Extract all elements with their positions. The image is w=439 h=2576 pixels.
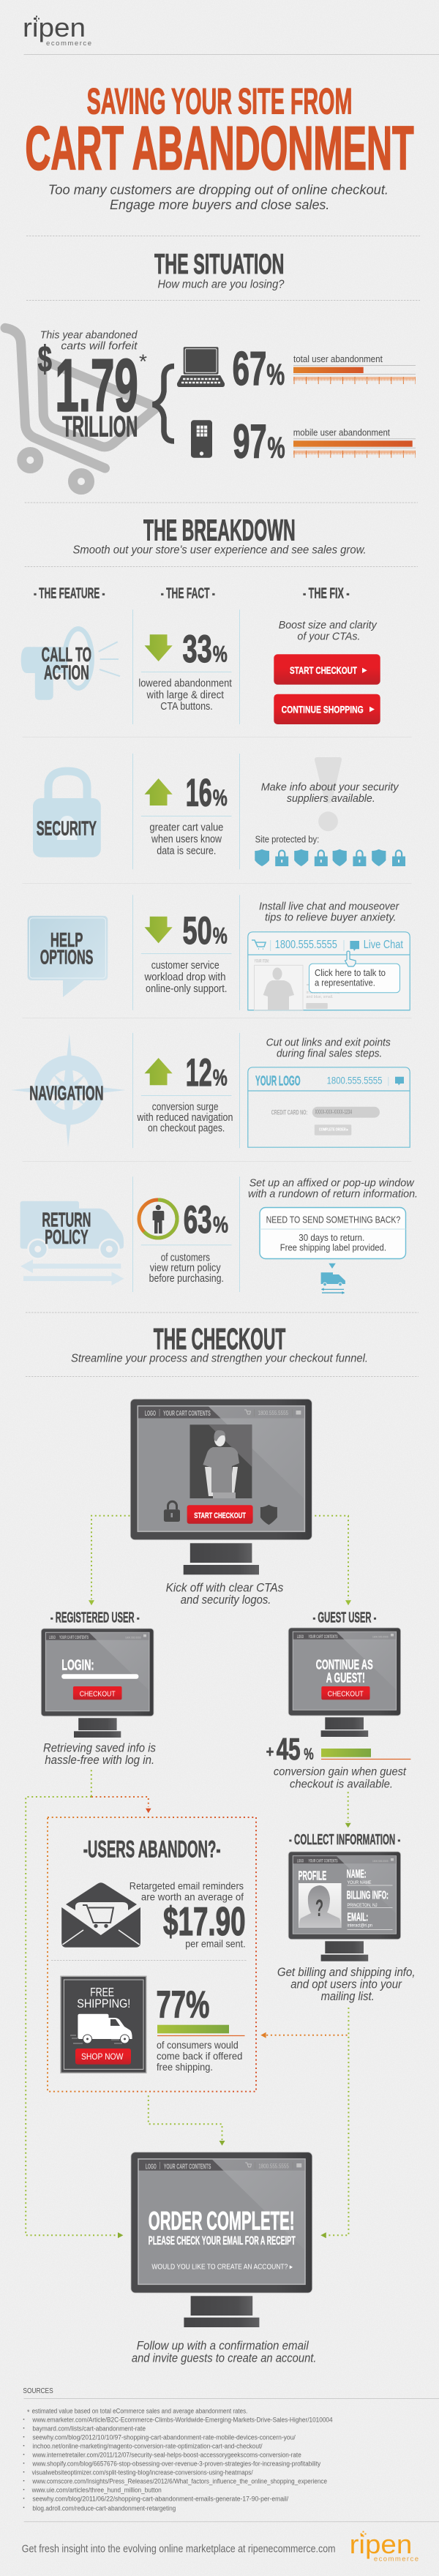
stat: 67 percent: 67: [233, 342, 266, 395]
fact text: view return policy: [150, 1263, 221, 1274]
checkout mockup: [248, 1067, 410, 1147]
profile fields: BILLING INFO:: [347, 1889, 389, 1901]
checkout mockup: CREDIT CARD NO:: [271, 1108, 307, 1116]
sources: www.shopify.com/blog/6657676-stop-obsessing-over-revenue-3-proven-strategies-for-increasing-profitability: [31, 2460, 321, 2467]
monitor: guest: CONTINUE AS: [316, 1657, 373, 1672]
fix text: [266, 1036, 391, 1059]
stat: 67 percent: %: [266, 357, 285, 391]
panel: help options: OPTIONS: [40, 946, 93, 969]
footer logo: ripen: [350, 2529, 412, 2559]
icon: small truck: [321, 1263, 345, 1294]
button: start checkout: [274, 654, 380, 685]
stat: 77 percent: come back if offered: [157, 2050, 242, 2062]
button: complete order: COMPLETE ORDER ▸: [319, 1128, 348, 1133]
fix text: [255, 781, 399, 845]
security badges: [255, 849, 405, 866]
stat: 50 percent: 50: [183, 909, 212, 953]
monitor: order complete: [131, 2152, 312, 2327]
icon: exclamation mark: [315, 757, 342, 831]
panel: security: SECURITY: [37, 817, 97, 840]
ad: free shipping: [61, 1976, 146, 2073]
text: email value: [130, 1880, 246, 1950]
stat: 33 percent: 33: [183, 628, 212, 671]
sources: SOURCES: [23, 2387, 53, 2395]
fact text: with reduced navigation: [137, 1112, 233, 1124]
stat: plus 45 percent: [266, 1732, 410, 1766]
flow arrowheads: [89, 1600, 351, 2238]
ad: free shipping: FREE: [90, 1986, 114, 1999]
stat: plus 45 percent: +: [266, 1743, 274, 1761]
ad: free shipping: SHOP NOW: [81, 2051, 124, 2062]
sources: baymard.com/lists/cart-abandonment-rate: [32, 2425, 146, 2432]
input field: [312, 1107, 380, 1118]
text: follow up: [132, 2340, 316, 2365]
icon: lock: [164, 1501, 180, 1522]
column headers: - THE FIX -: [303, 586, 350, 602]
panel: return policy: RETURN: [42, 1209, 91, 1231]
input field: XXXX-XXX-XXXX-1234: [315, 1109, 352, 1116]
monitor: login: LOGO: [49, 1635, 56, 1640]
fix text: [259, 900, 399, 923]
heading: the breakdown: THE BREAKDOWN: [143, 513, 296, 547]
popup: click here: [309, 964, 399, 993]
icon: hand cursor: [345, 951, 356, 966]
bar: total user abandonment: [293, 354, 416, 380]
icon: speech bubble: [28, 916, 108, 997]
fact text: when users know: [151, 834, 222, 846]
icon: envelope with cart: [61, 1882, 140, 1948]
stat: 1.79 trillion: [38, 330, 148, 443]
fix text: [279, 619, 378, 642]
text: email value: $17.90: [163, 1899, 246, 1944]
column headers: - THE FACT -: [161, 586, 215, 602]
monitor: order complete: ORDER COMPLETE!: [149, 2207, 295, 2236]
button: continue shopping: [274, 694, 380, 724]
figure: t-shirt model: [263, 967, 294, 1010]
text: email value: Retargeted email reminders: [130, 1880, 244, 1891]
fact text: customer service: [151, 960, 220, 972]
heading: registered user: - REGISTERED USER -: [50, 1610, 140, 1626]
monitor: start checkout: [130, 1399, 312, 1574]
sources: www.internetretailer.com/2011/12/07/security-seal-helps-boost-accessorygeekscoms-conversion-rate: [31, 2451, 301, 2458]
text: kick off: [166, 1581, 283, 1607]
column headers: - THE FEATURE -: [34, 586, 105, 602]
profile photo: ?: [315, 1895, 323, 1921]
monitor: login: YOUR CART CONTENTS: [59, 1635, 89, 1640]
text: billing info: [277, 1966, 416, 2003]
fact text: [137, 1102, 233, 1135]
fact text: lowered abandonment: [138, 677, 232, 689]
monitor: order complete: WOULD YOU LIKE TO CREATE AN ACCOUNT? ▸: [151, 2263, 293, 2271]
monitor: guest: LOGO: [297, 1634, 304, 1640]
panel: users abandon: [51, 1835, 247, 2073]
button: complete order: [315, 1124, 351, 1135]
stat: 1.79 trillion: carts will forfeit: [61, 340, 138, 352]
fix text: Boost size and clarity: [279, 619, 378, 631]
heading: the situation: THE SITUATION: [154, 249, 284, 280]
panel: call to action: [21, 619, 380, 724]
icon: white truck: [70, 2014, 132, 2043]
icon: phone: [191, 420, 212, 458]
stat: 97 percent: 97: [233, 415, 267, 468]
sources: estimated value based on total eCommerce sales and average abandonment rates.: [32, 2407, 247, 2414]
fact text: [149, 822, 223, 857]
column headers: [34, 586, 350, 602]
header logo: ecommerce: [46, 40, 91, 48]
icon: arrow up: [145, 1058, 173, 1085]
fix text: Cut out links and exit points: [266, 1036, 391, 1048]
stat: 97 percent: %: [268, 430, 285, 464]
live chat mockup: 1800.555.5555: [275, 939, 337, 951]
panel: help options: [28, 900, 410, 1010]
heading: the situation: How much are you losing?: [158, 278, 285, 290]
icon: arrow down: [145, 917, 173, 943]
text: follow up: and invite guests to create an account.: [132, 2351, 316, 2365]
icon: shield: [260, 1505, 277, 1525]
fix text: during final sales steps.: [277, 1047, 382, 1059]
sources: visualwebsiteoptimizer.com/split-testing-blog/increase-conversions-using-heatmaps/: [32, 2468, 253, 2476]
heading: the checkout: [71, 1322, 368, 1365]
header logo: ripen: [23, 12, 86, 42]
fix text: Site protected by:: [255, 835, 319, 845]
stat: 63 percent: %: [213, 1212, 228, 1238]
button: start checkout: START CHECKOUT: [194, 1512, 246, 1520]
bar: mobile user abandonment: mobile user abandonment: [293, 428, 390, 438]
brace: [153, 366, 174, 441]
text: retrieving saved info: Retrieving saved info is: [43, 1741, 156, 1754]
stat: plus 45 percent: 45: [277, 1732, 301, 1766]
monitor: guest: A GUEST!: [326, 1670, 365, 1685]
monitor: login: 1800.555.5555: [125, 1636, 141, 1639]
fix text: of your CTAs.: [297, 630, 360, 642]
sources: inchoo.net/online-marketing/magento-conversion-rate-optimization-cart-and-checkout/: [32, 2442, 263, 2449]
monitor: collect information: [288, 1852, 401, 1961]
monitor: login: [41, 1629, 154, 1738]
icon: arrow down: [145, 634, 173, 661]
icon: arrow up: [145, 778, 173, 806]
monitor: start checkout: LOGO: [145, 1410, 156, 1418]
live chat mockup: Live Chat: [364, 939, 404, 951]
profile fields: [347, 1869, 392, 1930]
fact text: on checkout pages.: [148, 1123, 225, 1135]
panel: navigation: NAVIGATION: [29, 1081, 104, 1104]
stat: 63 percent: 63: [184, 1198, 212, 1242]
monitor: collect information: LOGO: [297, 1858, 304, 1864]
fact text: data is secure.: [157, 845, 216, 857]
profile fields: EMAIL:: [347, 1912, 368, 1924]
panel: security: [33, 757, 405, 866]
intro text: Engage more buyers and close sales.: [110, 197, 329, 212]
sources: seewhy.com/blog/2012/10/10/97-shopping-cart-abandonment-rate-mobile-devices-concern-you/: [32, 2433, 296, 2441]
stat: 1.79 trillion: TRILLION: [62, 411, 138, 443]
button: checkout: CHECKOUT: [328, 1689, 364, 1698]
monitor: order complete: 1800.555.5555: [258, 2163, 289, 2170]
sources: seewhy.com/blog/2011/06/22/shopping-cart-abandonment-emails-generate-17-90-per-email/: [32, 2495, 289, 2502]
profile fields: NAME:: [347, 1869, 367, 1881]
stat: 12 percent: 12: [186, 1051, 212, 1094]
fact text: online-only support.: [146, 983, 227, 995]
stat: 1.79 trillion: 1.79: [55, 344, 138, 427]
popup: return information: [260, 1207, 405, 1258]
text: retrieving saved info: [43, 1741, 156, 1767]
text: kick off: Kick off with clear CTAs: [166, 1581, 283, 1594]
fact text: [144, 960, 227, 995]
sources: www.uie.com/articles/three_hund_million_button: [31, 2486, 162, 2493]
text: email value: per email sent.: [185, 1938, 246, 1950]
stat: 77 percent: [157, 1983, 244, 2073]
bar: total user abandonment: total user abandonment: [293, 354, 383, 364]
live chat mockup: in black, white, red,: [306, 991, 340, 995]
popup: return information: NEED TO SEND SOMETHING BACK?: [266, 1214, 400, 1225]
stat: 77 percent: free shipping.: [157, 2061, 213, 2073]
stat: 16 percent: %: [213, 784, 228, 811]
fact text: workload drop with: [144, 972, 225, 983]
monitor: start checkout: 1800.555.5555: [258, 1410, 288, 1416]
sources: www.comscore.com/Insights/Press_Releases/2012/6/What_factors_influence_the_online_shopping_experience: [31, 2477, 327, 2485]
footer logo: ecommerce: [374, 2556, 419, 2564]
flow connectors: [26, 1516, 348, 2235]
fix text: suppliers available.: [287, 792, 375, 805]
stat: plus 45 percent: %: [304, 1745, 314, 1763]
icon: cart: [252, 940, 266, 949]
popup: return information: Free shipping label provided.: [280, 1242, 386, 1253]
icon: chat bubble: [350, 941, 359, 951]
text: billing info: Get billing and shipping info,: [277, 1966, 416, 1979]
monitor: order complete: YOUR CART CONTENTS: [164, 2163, 211, 2171]
button: start checkout: START CHECKOUT: [290, 665, 358, 676]
fix text: Install live chat and mouseover: [259, 900, 399, 912]
live chat mockup: [248, 932, 410, 1010]
icon: person: [153, 1205, 164, 1233]
profile fields: YOUR NAME: [347, 1880, 372, 1885]
heading: guest user: - GUEST USER -: [313, 1610, 376, 1626]
monitor: guest: YOUR CART CONTENTS: [309, 1634, 338, 1640]
heading: the checkout: Streamline your process and strengthen your checkout funnel.: [71, 1353, 368, 1365]
monitor: collect information: 1800.555.5555: [372, 1859, 389, 1863]
bar: mobile user abandonment: [293, 428, 416, 454]
fix text: with a rundown of return information.: [248, 1188, 418, 1201]
popup: return information: 30 days to return.: [299, 1232, 364, 1243]
product photo: [190, 1424, 252, 1498]
panel: help options: HELP: [50, 928, 83, 951]
icon: chat bubble: [395, 1077, 404, 1086]
sources: blog.adroll.com/reduce-cart-abandonment-retargeting: [32, 2504, 176, 2512]
button: checkout: [73, 1686, 121, 1700]
monitor: order complete: PLEASE CHECK YOUR EMAIL FOR A RECEIPT: [149, 2234, 296, 2248]
text: email value: are worth an average of: [141, 1890, 244, 1902]
fact text: of customers: [161, 1252, 210, 1263]
monitor: guest: 1800.555.5555: [372, 1634, 389, 1639]
monitor: collect information: YOUR CART CONTENTS: [309, 1858, 338, 1864]
text: billing info: and opt users into your: [290, 1978, 402, 1991]
stat: 50 percent: %: [213, 922, 228, 948]
checkout mockup: 1800.555.5555: [327, 1075, 382, 1086]
text: billing info: mailing list.: [321, 1990, 375, 2003]
panel: return policy: [20, 1177, 418, 1294]
checkout mockup: YOUR LOGO: [255, 1073, 301, 1088]
text: conversion gain: conversion gain when guest: [274, 1766, 407, 1779]
fact text: conversion surge: [152, 1102, 218, 1114]
text: conversion gain: checkout is available.: [290, 1778, 393, 1790]
monitor: login: LOGIN:: [61, 1656, 94, 1673]
live chat mockup: and blue, small.: [306, 995, 334, 999]
panel: navigation: [11, 1034, 410, 1147]
sources: [23, 2387, 439, 2512]
heading: the situation: [154, 249, 285, 290]
monitor: collect information: PROFILE: [299, 1868, 326, 1882]
title: [25, 80, 414, 183]
fact text: greater cart value: [149, 822, 223, 834]
fact text: [149, 1252, 224, 1285]
monitor: guest: [288, 1628, 401, 1737]
stat: 16 percent: 16: [186, 772, 212, 815]
stat: 12 percent: %: [213, 1064, 228, 1090]
profile fields: interact@ri.pn: [347, 1923, 372, 1929]
fix text: [248, 1177, 418, 1201]
button: checkout: CHECKOUT: [80, 1689, 116, 1698]
stat: 77 percent: 77%: [157, 1983, 209, 2026]
fact text: before purchasing.: [149, 1273, 224, 1285]
monitor: start checkout: YOUR CART CONTENTS: [163, 1410, 211, 1418]
fix text: tips to relieve buyer anxiety.: [265, 911, 397, 923]
icon: shopping cart: [5, 328, 157, 490]
fact text: CTA buttons.: [160, 701, 213, 713]
ad: free shipping: SHIPPING!: [77, 1997, 130, 2010]
text: retrieving saved info: hassle-free with log in.: [45, 1754, 154, 1767]
stat: 1.79 trillion: *: [139, 350, 148, 372]
stat: 33 percent: %: [213, 640, 228, 666]
icon: megaphone: [21, 626, 120, 700]
heading: the breakdown: Smooth out your store's user experience and see sales grow.: [73, 544, 367, 557]
sources: *: [27, 2408, 30, 2416]
chart: donut 63 percent: [139, 1200, 177, 1238]
button: continue shopping: CONTINUE SHOPPING: [282, 704, 364, 715]
icon: compass: [11, 1034, 126, 1147]
fact text: [138, 677, 232, 713]
icon: delivery truck: [20, 1201, 124, 1260]
text: kick off: and security logos.: [181, 1593, 271, 1607]
panel: call to action: ACTION: [44, 661, 89, 683]
profile fields: PRINCETON, NJ: [347, 1903, 378, 1908]
button: checkout: [321, 1686, 370, 1700]
heading: the breakdown: [73, 513, 367, 557]
button: start checkout: [187, 1505, 253, 1524]
sources: www.emarketer.com/Article/B2C-Ecommerce-Climbs-Worldwide-Emerging-Markets-Drive-Sales-Higher/1010004: [31, 2416, 333, 2423]
panel: users abandon: -USERS ABANDON?-: [83, 1835, 221, 1862]
fact text: with large & direct: [146, 689, 224, 701]
stat: 77 percent: of consumers would: [157, 2039, 239, 2051]
stat: 1.79 trillion: $: [38, 339, 52, 380]
heading: the checkout: THE CHECKOUT: [154, 1322, 285, 1356]
text: conversion gain: [274, 1766, 407, 1790]
icon: padlock: [33, 771, 101, 857]
fix text: Make info about your security: [261, 781, 399, 794]
stat: 1.79 trillion: This year abandoned: [40, 330, 138, 342]
live chat mockup: YOUR ITEM:: [255, 960, 269, 964]
footer text: Get fresh insight into the evolving online marketplace at ripenecommerce.com: [22, 2542, 336, 2555]
fix text: Set up an affixed or pop-up window: [249, 1177, 415, 1190]
profile photo: [299, 1883, 341, 1928]
text: follow up: Follow up with a confirmation email: [137, 2340, 309, 2353]
icon: return arrows: [20, 1260, 124, 1285]
popup: click here: a representative.: [315, 977, 375, 988]
intro text: Too many customers are dropping out of online checkout.: [48, 182, 389, 198]
monitor: order complete: LOGO: [146, 2163, 157, 2171]
panel: call to action: CALL TO: [42, 643, 91, 666]
popup: click here: Click here to talk to: [315, 967, 386, 978]
icon: laptop: [177, 347, 225, 387]
panel: return policy: POLICY: [45, 1225, 89, 1248]
intro text: [48, 182, 389, 212]
